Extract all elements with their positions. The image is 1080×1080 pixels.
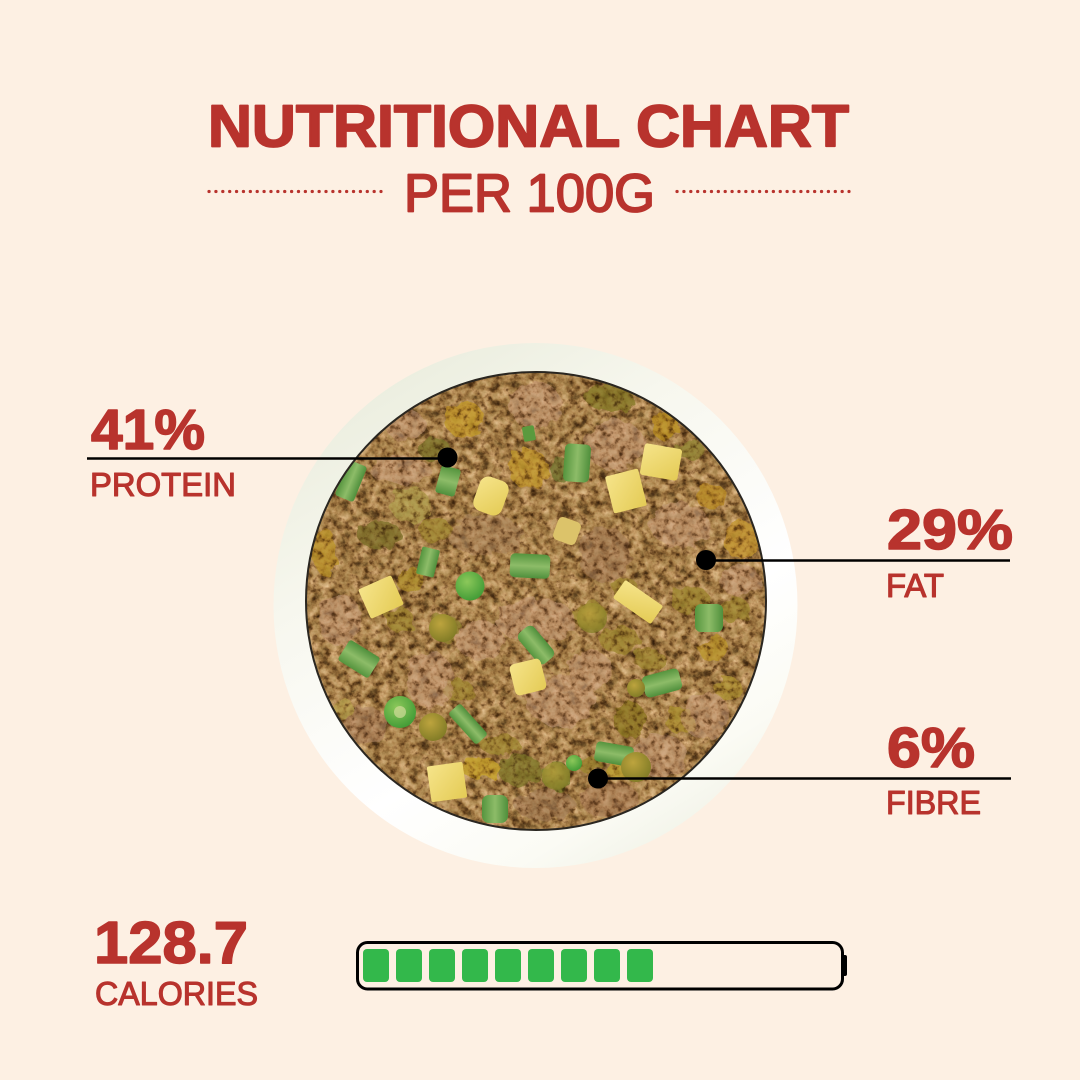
calorie battery gauge <box>358 942 847 989</box>
callout: fat: FAT <box>886 567 944 604</box>
subtitle with dotted rules: PER 100G <box>404 164 655 224</box>
ground meat patches <box>318 381 760 821</box>
green beans and peas <box>335 425 723 823</box>
food edge <box>306 372 766 830</box>
title: NUTRITIONAL CHART <box>208 94 849 160</box>
food surface <box>300 366 772 836</box>
calories figure: CALORIES <box>95 975 258 1012</box>
callout: fibre: FIBRE <box>886 784 981 821</box>
callout: fibre: 6% <box>887 716 975 780</box>
callout: fibre <box>588 716 1011 821</box>
bowl rim <box>274 343 798 868</box>
callout: protein: PROTEIN <box>90 466 236 503</box>
callout: fat: 29% <box>887 498 1013 562</box>
callout: protein: 41% <box>91 398 205 462</box>
yellow potato cubes <box>358 443 682 802</box>
calories figure <box>94 910 258 1012</box>
callout: fat <box>696 498 1013 604</box>
olive vegetable chunks <box>313 384 760 790</box>
callout: protein <box>87 398 458 503</box>
calories figure: 128.7 <box>94 910 248 976</box>
bowl with food <box>274 343 798 868</box>
crumb texture overlay <box>300 366 772 836</box>
